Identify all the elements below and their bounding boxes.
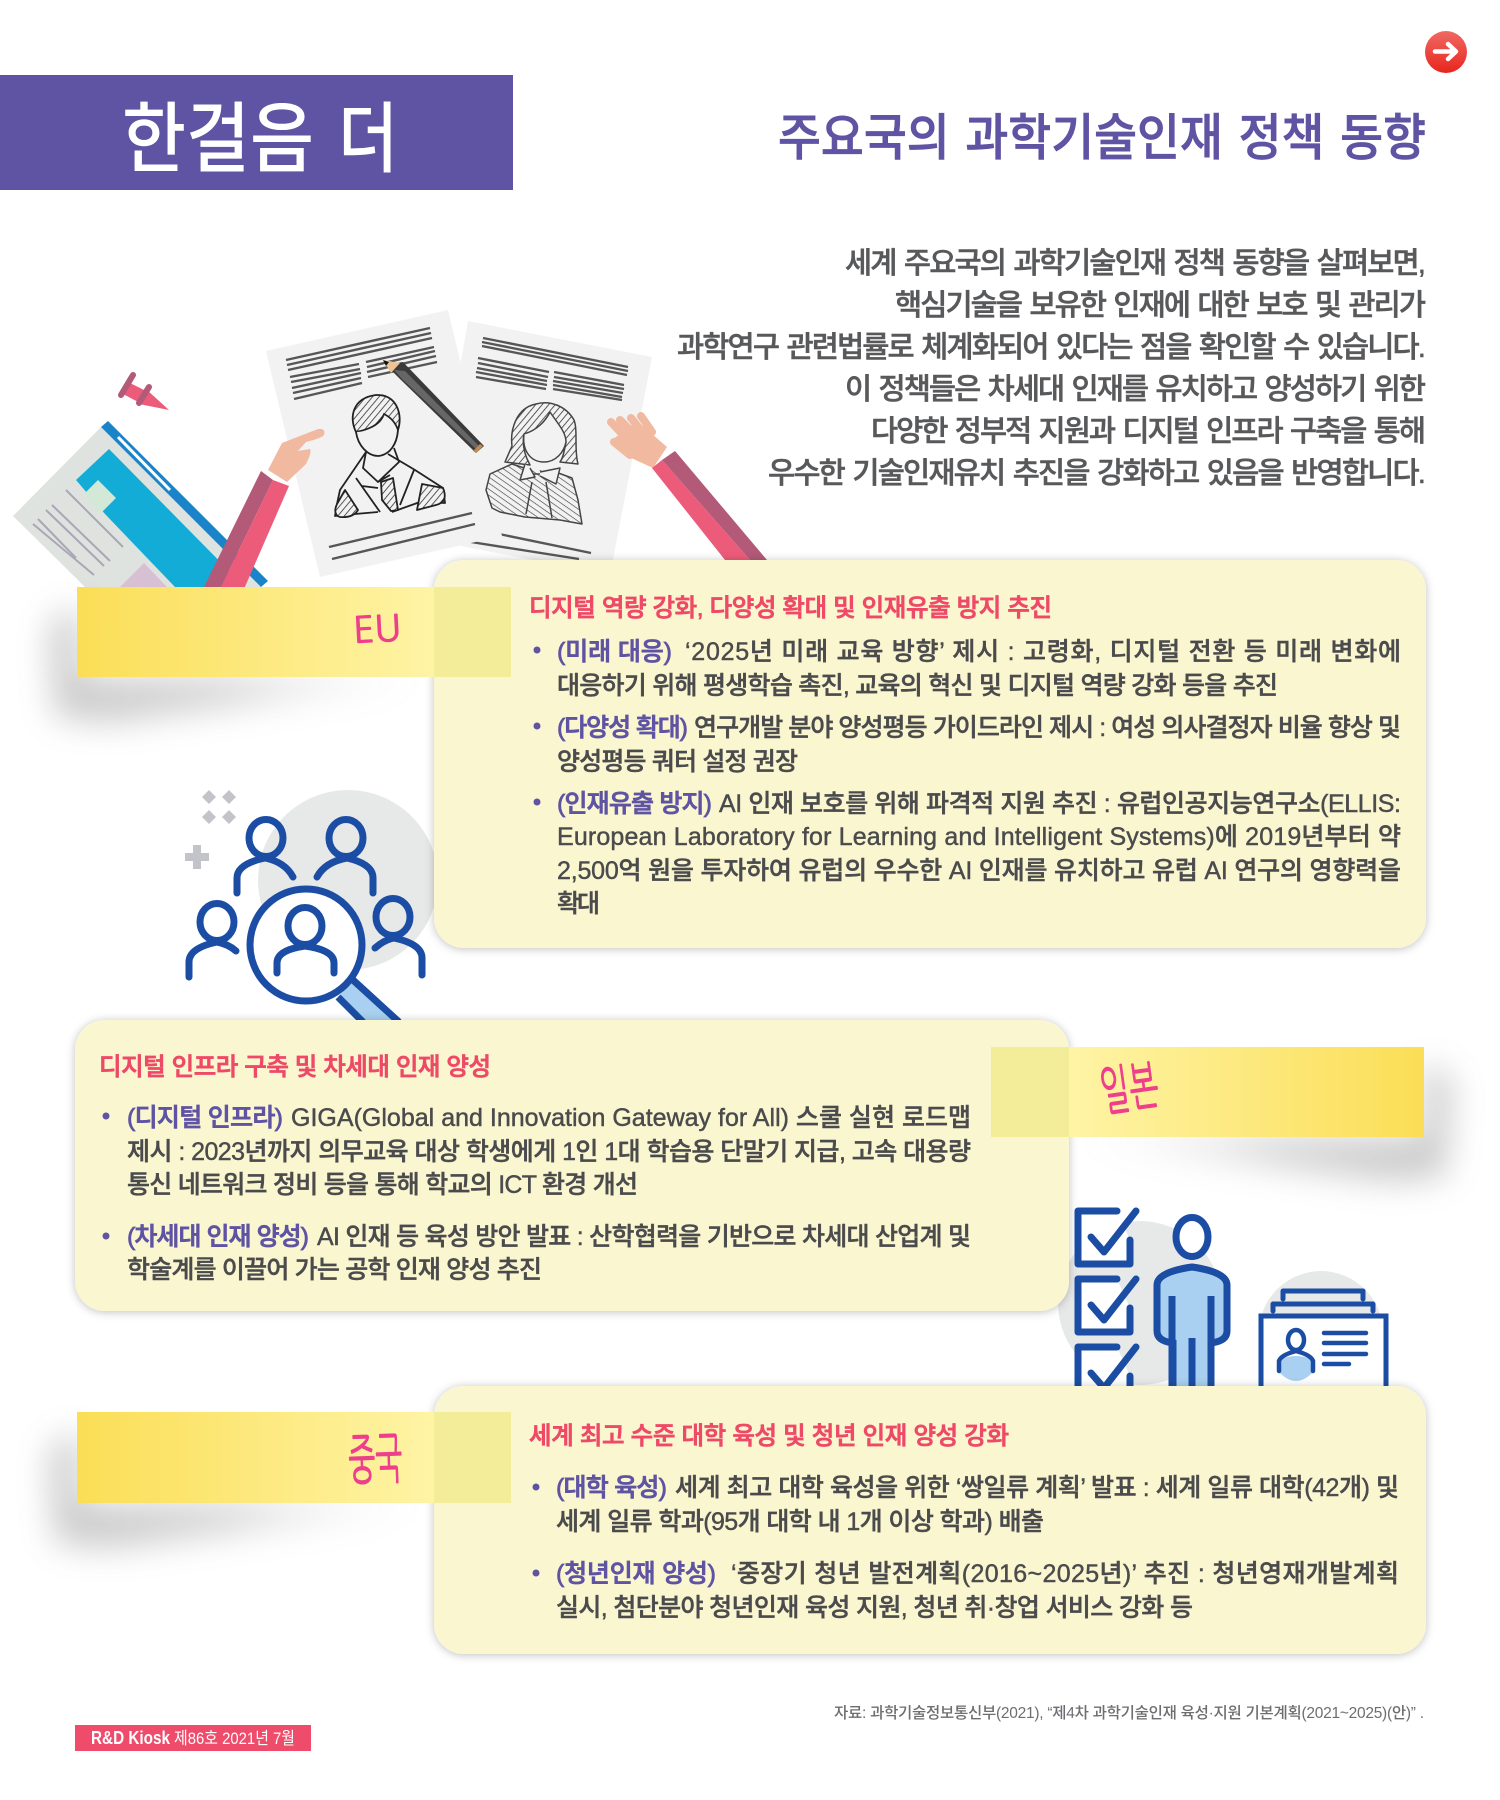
EU bullet 2: 연구개발 분야 양성평등 가이드라인 제시 : 여성 의사결정자 비율 향상 및 (694, 714, 1401, 742)
pencil (383, 360, 484, 453)
Japan bullet 2 (102, 1223, 971, 1284)
Japan bullet 1: GIGA(Global and Innovation Gateway for All) 스쿨 실현 로드맵 (291, 1104, 971, 1132)
Japan bullet 2: (차세대 인재 양성) (127, 1223, 309, 1251)
EU bullet 3: (인재유출 방지) (557, 790, 712, 818)
paper left (266, 310, 502, 577)
illustration: documents and hands (13, 310, 767, 589)
sketch: woman (486, 403, 582, 524)
Japan bullet 1: (디지털 인프라) (127, 1104, 283, 1132)
Japan panel text (99, 1053, 971, 1284)
Japan bullet 1 (102, 1104, 971, 1199)
footer badge: R&D Kiosk (91, 1728, 171, 1748)
heading: 주요국의 과학기술인재 정책 동향 (778, 110, 1426, 166)
China heading: 세계 최고 수준 대학 육성 및 청년 인재 양성 강화 (529, 1422, 1009, 1450)
China bullet 2: ‘중장기 청년 발전계획(2016~2025년)’ 추진 : 청년영재개발계획 (731, 1560, 1399, 1588)
icon: ID card (1259, 1271, 1386, 1395)
intro text block: 과학연구 관련법률로 체계화되어 있다는 점을 확인할 수 있습니다. (677, 331, 1426, 364)
tablet (13, 421, 268, 587)
EU bullet 3: 확대 (557, 890, 600, 918)
EU bullet 3 (534, 790, 1401, 918)
intro text block: 이 정책들은 차세대 인재를 유치하고 양성하기 위한 (845, 373, 1426, 406)
EU panel text (529, 594, 1401, 918)
footer badge: 제86호 2021년 7월 (174, 1729, 295, 1748)
sketch: man (335, 395, 445, 517)
paper right (430, 321, 652, 575)
tape label: China: 중국 (347, 1431, 403, 1487)
China bullet 1: (대학 육성) (556, 1474, 667, 1502)
China bullet 1 (532, 1474, 1399, 1536)
EU heading: 디지털 역량 강화, 다양성 확대 및 인재유출 방지 추진 (529, 594, 1052, 622)
EU bullet 1: ‘2025년 미래 교육 방향’ 제시 : 고령화, 디지털 전환 등 미래 변화에 (685, 638, 1401, 666)
panel: China (434, 1386, 1426, 1654)
source note: 자료: 과학기술정보통신부(2021), “제4차 과학기술인재 육성·지원 기본계획(2021~2025)(안)” . (834, 1704, 1424, 1722)
title banner (0, 75, 513, 190)
EU bullet 1 (534, 638, 1401, 700)
intro text block: 세계 주요국의 과학기술인재 정책 동향을 살펴보면, (845, 247, 1426, 280)
tape label: China (77, 1412, 511, 1503)
icon: next arrow (1425, 31, 1467, 73)
intro text block (677, 247, 1426, 490)
right arm (611, 416, 767, 560)
China bullet 2: 실시, 첨단분야 청년인재 육성 지원, 청년 취·창업 서비스 강화 등 (556, 1594, 1193, 1622)
Japan bullet 1: 제시 : 2023년까지 의무교육 대상 학생에게 1인 1대 학습용 단말기 지급, 고속 대용량 (127, 1138, 971, 1166)
title banner: 한걸음 (122, 97, 314, 183)
China bullet 1: 세계 일류 학과(95개 대학 내 1개 이상 학과) 배출 (556, 1508, 1044, 1536)
EU bullet 3: AI 인재 보호를 위해 파격적 지원 추진 : 유럽인공지능연구소(ELLIS: (719, 790, 1401, 818)
China bullet 1: 세계 최고 대학 육성을 위한 ‘쌍일류 계획’ 발표 : 세계 일류 대학(42개) 및 (675, 1474, 1399, 1502)
footer badge (75, 1725, 311, 1751)
tape label: Japan (991, 1047, 1424, 1137)
tape shadow: China (50, 1430, 425, 1548)
panel: EU (434, 560, 1426, 948)
China panel text (529, 1422, 1399, 1622)
icon: people with magnifier (185, 790, 438, 1022)
EU bullet 2: (다양성 확대) (557, 714, 688, 742)
tape shadow: Japan (1075, 1062, 1452, 1181)
intro text block: 우수한 기술인재유치 추진을 강화하고 있음을 반영합니다. (768, 457, 1426, 490)
tape shadow: EU (50, 605, 425, 722)
China bullet 2: (청년인재 양성) (556, 1560, 716, 1588)
China bullet 2 (532, 1560, 1399, 1622)
icon: checklist and person (1058, 1211, 1227, 1400)
Japan bullet 2: 학술계를 이끌어 가는 공학 인재 양성 추진 (127, 1256, 542, 1284)
Japan bullet 1: 통신 네트워크 정비 등을 통해 학교의 ICT 환경 개선 (127, 1171, 638, 1199)
tape label: EU: EU (352, 611, 402, 649)
EU bullet 1: 대응하기 위해 평생학습 촉진, 교육의 혁신 및 디지털 역량 강화 등을 추진 (557, 672, 1278, 700)
EU bullet 3: European Laboratory for Learning and Intelligent Systems)에 2019년부터 약 (557, 823, 1401, 851)
intro text block: 핵심기술을 보유한 인재에 대한 보호 및 관리가 (895, 289, 1426, 322)
Japan bullet 2: AI 인재 등 육성 방안 발표 : 산학협력을 기반으로 차세대 산업계 및 (317, 1223, 971, 1251)
EU bullet 2: 양성평등 쿼터 설정 권장 (557, 748, 798, 776)
left arm (203, 429, 324, 589)
intro text block: 다양한 정부적 지원과 디지털 인프라 구축을 통해 (871, 415, 1426, 448)
title banner: 더 (338, 97, 398, 183)
panel: Japan (75, 1020, 1069, 1311)
tape label: EU (77, 587, 511, 677)
EU bullet 2 (534, 714, 1401, 776)
pin (121, 375, 169, 410)
Japan heading: 디지털 인프라 구축 및 차세대 인재 양성 (99, 1053, 491, 1081)
EU bullet 3: 2,500억 원을 투자하여 유럽의 우수한 AI 인재를 유치하고 유럽 AI 연구의 영향력을 (557, 857, 1401, 885)
tape label: Japan: 일본 (1097, 1058, 1162, 1118)
EU bullet 1: (미래 대응) (557, 638, 672, 666)
